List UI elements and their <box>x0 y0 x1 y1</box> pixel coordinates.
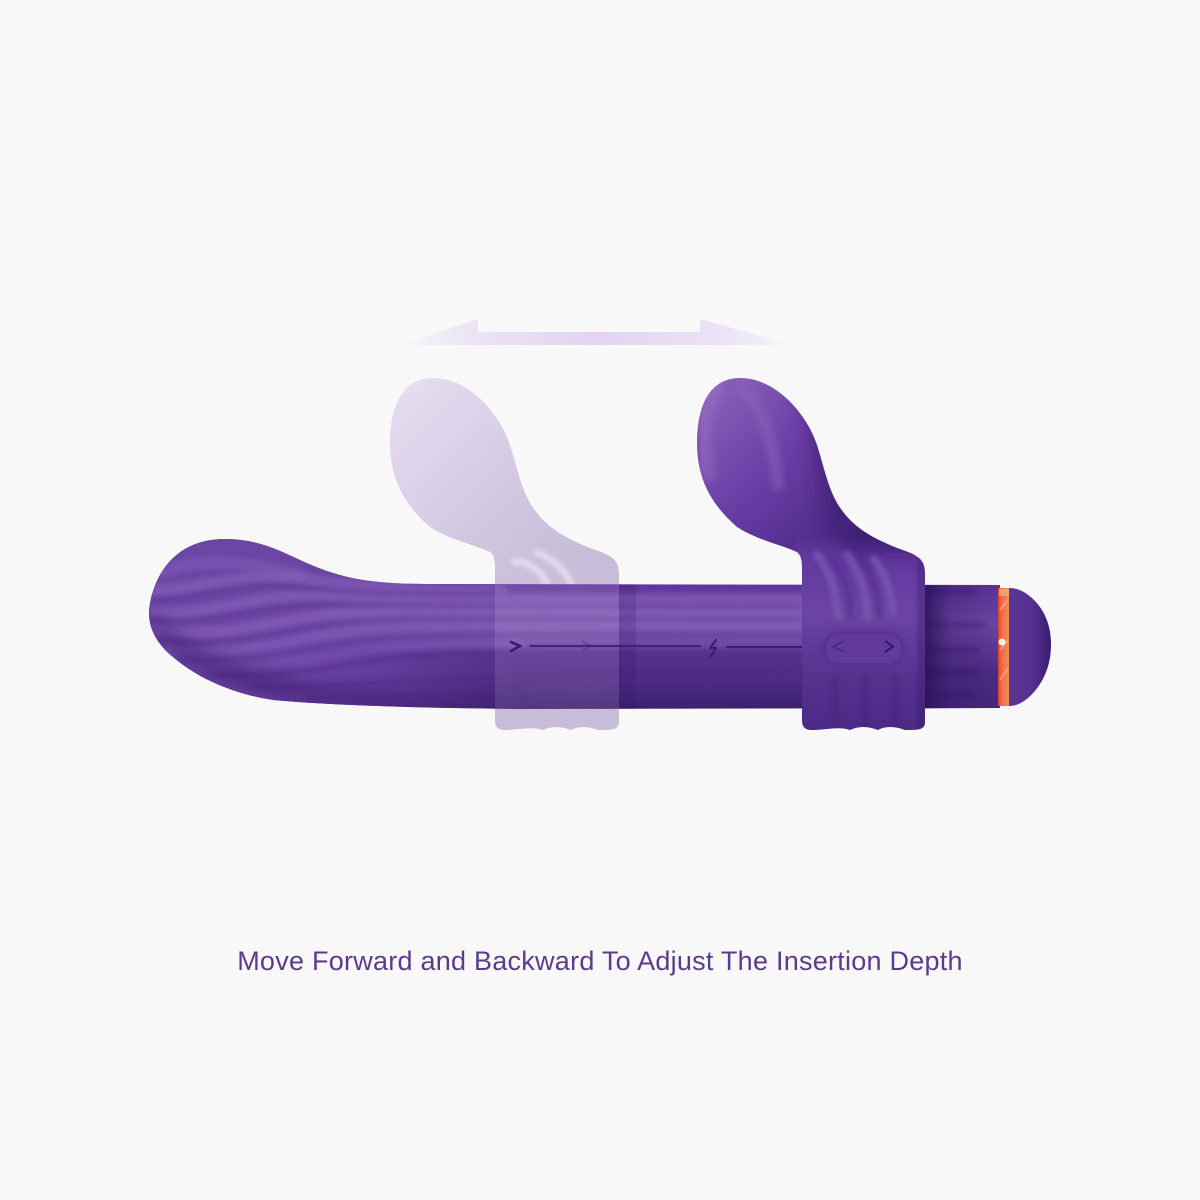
product body: shaft and ribbed head <box>149 539 1000 709</box>
LED ring band <box>998 588 1009 706</box>
ghost sleeve overlap <box>495 580 619 715</box>
double arrow: forward and backward <box>400 319 792 345</box>
head lower shading <box>149 610 520 712</box>
head rib grooves <box>222 584 798 684</box>
adjustable attachment: bulb and sleeve <box>690 370 930 735</box>
handle section <box>925 585 1000 710</box>
slider button <box>823 632 903 663</box>
end cap <box>1009 588 1051 706</box>
caption: Move Forward and Backward To Adjust The Insertion Depth <box>237 946 963 976</box>
head rib highlights <box>155 563 800 666</box>
control track with arrows and lightning icon <box>511 640 802 656</box>
ghost attachment: rear position <box>390 378 619 730</box>
